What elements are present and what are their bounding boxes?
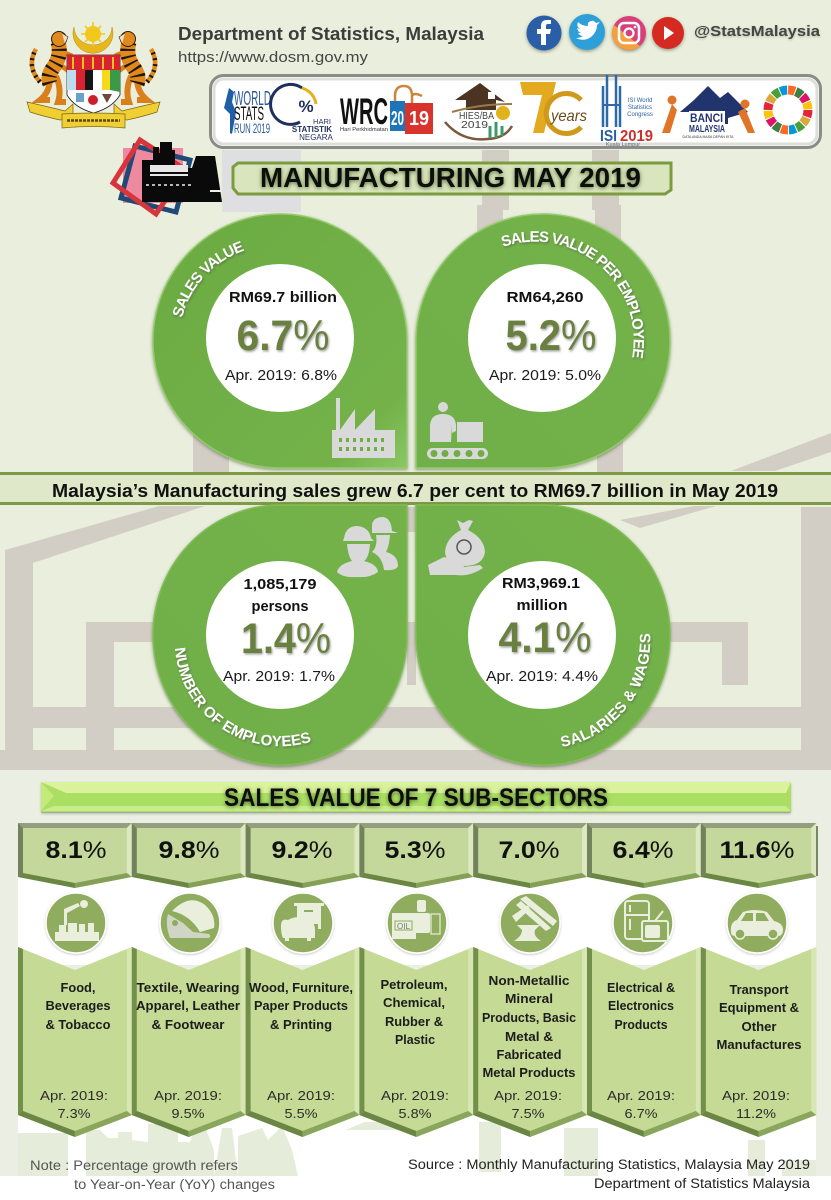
logo: 70 years: [520, 82, 587, 134]
growth: 8.1%: [46, 837, 106, 864]
sector name: Other: [742, 1019, 776, 1034]
previous month: Apr. 2019:: [154, 1088, 222, 1103]
sector name: [249, 980, 353, 1032]
logo: hari statistik negara: %: [298, 97, 314, 116]
footnote: to Year-on-Year (YoY) changes: [74, 1177, 275, 1192]
curved label: [182, 251, 243, 318]
sector name: Metal Products: [482, 1065, 576, 1080]
icon: factory with squares: [113, 140, 222, 214]
logo: hari statistik negara: STATISTIK: [292, 125, 332, 134]
sector name: [380, 977, 448, 1047]
logo: isi 2019: 2019: [620, 128, 653, 145]
panel: partner logos: [210, 75, 820, 148]
previous month: Apr. 2019:: [40, 1088, 108, 1103]
previous month: Apr. 2019: 5.0%: [489, 368, 601, 384]
tigers: [32, 32, 155, 102]
panel: partner logos: WORLD: [234, 88, 271, 110]
source: [408, 1157, 811, 1191]
sector name: Rubber &: [385, 1014, 443, 1029]
header: website: https://www.dosm.gov.my: [178, 49, 369, 66]
shield: [67, 55, 120, 113]
previous month: [722, 1088, 790, 1121]
logo: world stats run: [224, 88, 271, 136]
previous month: [267, 1088, 335, 1121]
curved label: [175, 648, 316, 746]
panel: number of employees: NUMBER OF EMPLOYEES: [175, 648, 312, 749]
logo: hari statistik negara: NEGARA: [299, 133, 334, 142]
icon: [273, 893, 333, 953]
sector name: [46, 980, 111, 1032]
logo: isi 2019: Congress: [627, 112, 653, 118]
icon: worker on conveyor: [427, 402, 488, 459]
previous month: [607, 1088, 675, 1121]
social icons: [526, 14, 821, 50]
logo: hari statistik negara: [271, 84, 334, 142]
icon band: white backdrop: [18, 875, 816, 965]
previous month: 5.5%: [284, 1106, 318, 1121]
sector name: Fabricated: [496, 1047, 562, 1062]
footnote: Note : Percentage growth refers: [30, 1158, 238, 1173]
growth: 7.0%: [498, 837, 560, 864]
icon: OIL: [397, 922, 410, 931]
icon: twitter: [569, 14, 605, 50]
sector: petroleum, chemical, rubber and plastic: [359, 823, 473, 1137]
sector name: Products: [614, 1017, 668, 1032]
growth: 4.1%: [498, 614, 592, 662]
icon: factory: [332, 398, 395, 458]
sector name: Electronics: [608, 998, 674, 1013]
background: lower panel tone: [0, 770, 831, 1176]
previous month: 5.8%: [398, 1106, 432, 1121]
panel: number of employees: [150, 504, 410, 770]
logo: hies/ba 2019: [445, 83, 512, 139]
crescent and star: [73, 22, 113, 53]
sector name: Food,: [60, 980, 96, 995]
sector name: [136, 980, 240, 1032]
previous month: 11.2%: [736, 1106, 776, 1121]
logo: hies/ba 2019: 2019: [461, 120, 489, 131]
logo: wrc 2019: 20: [391, 108, 404, 130]
sector: transport equipment and other manufactures: [701, 823, 818, 1137]
sector name: [607, 980, 675, 1032]
sector: textile, wearing apparel, leather and footwear: [132, 823, 246, 1137]
sector: non-metallic mineral products, basic metal and fabricated metal products: [473, 823, 587, 1137]
logo: banci malaysia: DATA ANDA MASA DEPAN KITA: [683, 135, 734, 139]
social handle: @StatsMalaysia: [694, 23, 821, 40]
logo: isi 2019: ISI: [600, 128, 617, 145]
previous month: Apr. 2019:: [494, 1088, 562, 1103]
banner: headline: Malaysia’s Manufacturing sales grew 6.7 per cent to RM69.7 billion in May 2019: [52, 481, 778, 501]
previous month: Apr. 2019:: [267, 1088, 335, 1103]
sector: electrical and electronics products: [587, 823, 701, 1137]
sector: food, beverages and tobacco: [18, 823, 132, 1137]
logo: banci malaysia: [662, 86, 755, 139]
sector name: Mineral: [505, 991, 553, 1006]
panel: sales value: SALES VALUE: [173, 241, 246, 319]
heading: sales value of 7 sub-sectors: [41, 782, 791, 813]
logo: wrc 2019: WRC: [340, 91, 388, 132]
previous month: [381, 1088, 449, 1121]
logo: wrc 2019: 19: [409, 108, 429, 130]
sector name: Paper Products: [254, 998, 348, 1013]
title: MANUFACTURING MAY 2019: [260, 162, 641, 193]
header: department name: Department of Statistics, Malaysia: [178, 24, 485, 44]
previous month: Apr. 2019: 4.4%: [486, 669, 598, 685]
logo: 70 years: years: [550, 108, 587, 125]
sector name: Electrical &: [607, 980, 675, 995]
icon: [160, 893, 220, 953]
footnote: [30, 1158, 275, 1192]
sector name: Equipment &: [719, 1000, 799, 1015]
growth: 6.4%: [612, 837, 674, 864]
sector name: Metal &: [505, 1029, 553, 1044]
panel: salaries and wages: [413, 504, 673, 770]
curved label: [503, 242, 634, 358]
sector name: & Printing: [270, 1017, 332, 1032]
value: 1,085,179: [244, 576, 316, 593]
panel: salaries and wages: SALARIES & WAGES: [560, 634, 652, 749]
logo: world stats run: STATS: [234, 104, 264, 125]
previous month: 9.5%: [172, 1106, 205, 1121]
icon: money bag on hand: [428, 520, 485, 575]
icon: [500, 893, 560, 953]
growth: 9.8%: [158, 837, 220, 864]
sector name: Products, Basic: [482, 1010, 576, 1025]
previous month: Apr. 2019: 6.8%: [225, 368, 337, 384]
sector name: Manufactures: [716, 1037, 802, 1052]
growth: 11.6%: [720, 837, 794, 864]
sector name: Transport: [730, 982, 789, 997]
unit: persons: [252, 598, 308, 615]
value: RM69.7 billion: [229, 289, 337, 306]
previous month: 6.7%: [624, 1106, 658, 1121]
previous month: Apr. 2019:: [381, 1088, 449, 1103]
growth: 5.3%: [384, 837, 446, 864]
previous month: 7.5%: [512, 1106, 545, 1121]
logo: world stats run: RUN 2019: [234, 120, 270, 136]
heading: sales value of 7 sub-sectors: SALES VALUE OF 7 SUB-SECTORS: [224, 784, 608, 812]
logo: sdg wheel: [768, 90, 808, 130]
logo: wrc 2019: Hari Perkhidmatan: [340, 127, 388, 133]
panel: sales value per employee: [413, 212, 673, 472]
previous month: [154, 1088, 222, 1121]
previous month: Apr. 2019:: [722, 1088, 790, 1103]
growth: 1.4%: [241, 615, 331, 663]
sector name: Non-Metallic: [488, 973, 570, 988]
sector name: Textile, Wearing: [136, 980, 240, 995]
logo: isi 2019: Statistics: [628, 105, 652, 111]
value: RM64,260: [506, 289, 584, 306]
logo: banci malaysia: MALAYSIA: [689, 124, 725, 135]
logo: isi 2019: ISI World: [628, 98, 652, 104]
unit: million: [516, 597, 568, 614]
sector name: & Footwear: [152, 1017, 224, 1032]
growth: 5.2%: [506, 312, 596, 360]
logo: hari statistik negara: HARI: [313, 117, 331, 126]
logo: isi 2019: [600, 75, 653, 148]
icon: youtube: [652, 17, 684, 49]
panel: sales value per employee: SALES VALUE PER EMPLOYEE: [502, 231, 646, 360]
sector name: Petroleum,: [380, 977, 448, 992]
value: RM3,969.1: [502, 575, 580, 592]
previous month: [494, 1088, 562, 1121]
previous month: Apr. 2019:: [607, 1088, 675, 1103]
sector name: Chemical,: [383, 995, 445, 1010]
source: Source : Monthly Manufacturing Statistics, Malaysia May 2019: [408, 1157, 810, 1172]
sector name: [716, 982, 802, 1052]
sector name: & Tobacco: [46, 1017, 111, 1032]
icon: [46, 893, 106, 953]
logo: hies/ba 2019: HIES/BA: [459, 111, 494, 122]
sector name: Wood, Furniture,: [249, 980, 353, 995]
ribbon: [27, 102, 160, 128]
icon: instagram: [612, 16, 646, 50]
sector name: [482, 973, 576, 1080]
icon: [613, 893, 673, 953]
sector name: Plastic: [395, 1032, 435, 1047]
icon: facebook: [526, 16, 562, 50]
panel: sales value: [150, 212, 410, 472]
growth: 6.7%: [236, 312, 330, 360]
growth: 9.2%: [272, 837, 332, 864]
curved label: [562, 633, 650, 747]
logo: banci malaysia: BANCI: [690, 111, 723, 125]
icon: [727, 893, 787, 953]
background: city skyline: [0, 1110, 831, 1200]
logo: isi 2019: Kuala Lumpur: [606, 142, 640, 148]
icon: workers: [337, 517, 398, 577]
background: building outline: [0, 150, 831, 770]
banner: headline: [0, 474, 831, 504]
sector: wood, furniture, paper products and printing: [246, 823, 359, 1137]
previous month: 7.3%: [58, 1106, 91, 1121]
previous month: Apr. 2019: 1.7%: [223, 669, 335, 685]
sector name: Beverages: [46, 998, 110, 1013]
icon: [387, 893, 447, 953]
sector name: Apparel, Leather: [136, 998, 240, 1013]
source: Department of Statistics Malaysia: [594, 1176, 811, 1191]
header: coat of arms: [27, 22, 160, 128]
previous month: [40, 1088, 108, 1121]
